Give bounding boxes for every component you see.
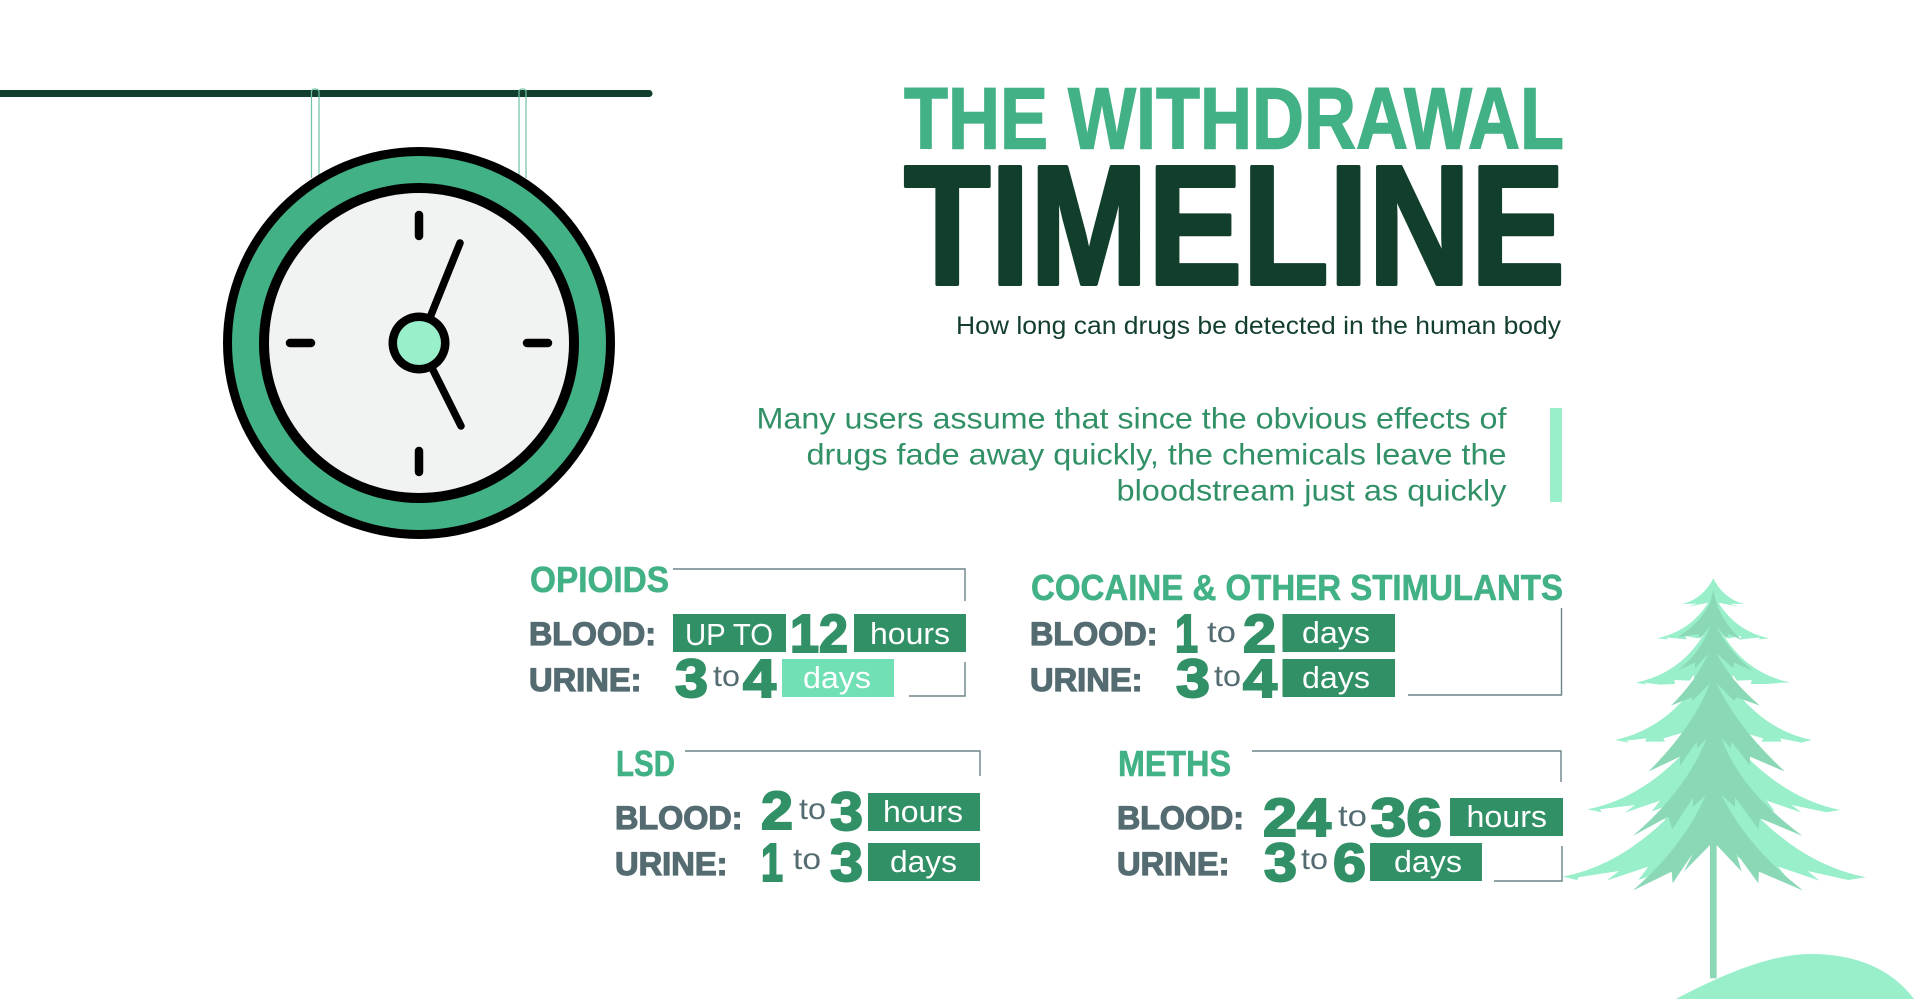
blood row: cocaine: BLOOD: bbox=[1030, 616, 1158, 652]
urine row: opioids: 3 bbox=[675, 649, 708, 709]
blood row: cocaine bbox=[1030, 604, 1395, 664]
urine row: lsd: URINE: bbox=[615, 846, 728, 882]
urine row: lsd: 3 bbox=[830, 833, 863, 893]
blood row: cocaine: to bbox=[1207, 616, 1236, 649]
panel: meths bbox=[1117, 743, 1563, 893]
urine row: lsd: 1 bbox=[761, 833, 783, 893]
urine row: meths: to bbox=[1301, 843, 1328, 876]
intro text block: bloodstream just as quickly bbox=[1116, 474, 1506, 508]
blood row: cocaine: 1 bbox=[1175, 604, 1198, 664]
blood row: opioids: 12 bbox=[790, 604, 848, 664]
icon: hill bbox=[1676, 954, 1914, 999]
heading: opioids: OPIOIDS bbox=[530, 559, 669, 600]
blood row: meths: BLOOD: bbox=[1117, 800, 1244, 836]
title: THE WITHDRAWAL bbox=[904, 70, 1564, 168]
blood row: meths: to bbox=[1338, 800, 1367, 833]
blood row: meths: 36 bbox=[1370, 788, 1442, 848]
urine row: meths: days bbox=[1394, 844, 1462, 879]
panel: cocaine and other stimulants bbox=[1030, 567, 1563, 709]
blood row: lsd: BLOOD: bbox=[615, 800, 742, 836]
urine row: cocaine: 3 bbox=[1176, 649, 1210, 709]
blood row: meths bbox=[1117, 788, 1563, 848]
intro text block bbox=[756, 402, 1507, 508]
urine row: cocaine: days bbox=[1302, 660, 1370, 695]
panel: lsd bbox=[615, 743, 980, 893]
urine row: lsd: to bbox=[793, 843, 821, 876]
intro text block: drugs fade away quickly, the chemicals leave the bbox=[806, 438, 1506, 472]
urine row: opioids bbox=[529, 649, 894, 709]
urine row: opioids: days bbox=[803, 660, 871, 695]
blood row: lsd: 2 bbox=[761, 781, 793, 841]
urine row: lsd: days bbox=[890, 844, 957, 879]
blood row: lsd: 3 bbox=[830, 782, 863, 842]
title bbox=[904, 70, 1565, 321]
blood row: lsd: hours bbox=[883, 794, 963, 829]
urine row: meths: 3 bbox=[1264, 833, 1297, 893]
intro text block: Many users assume that since the obvious effects of bbox=[756, 402, 1507, 436]
urine row: meths bbox=[1117, 833, 1482, 893]
blood row: opioids: UP TO bbox=[685, 617, 773, 652]
heading: meths: METHS bbox=[1118, 743, 1231, 784]
urine row: meths: 6 bbox=[1333, 833, 1366, 893]
blood row: cocaine: 2 bbox=[1243, 604, 1276, 664]
icon: clock bbox=[223, 147, 615, 539]
title: TIMELINE bbox=[904, 131, 1565, 321]
icon: pine tree bbox=[1563, 578, 1866, 978]
urine row: lsd bbox=[615, 833, 980, 893]
urine row: opioids: to bbox=[713, 660, 740, 693]
icon: hanging bar bbox=[0, 89, 649, 178]
panel: opioids bbox=[529, 559, 966, 709]
accent bar bbox=[1550, 408, 1562, 502]
urine row: opioids: 4 bbox=[743, 649, 776, 709]
urine row: cocaine bbox=[1030, 649, 1395, 709]
blood row: lsd bbox=[615, 781, 980, 842]
urine row: cocaine: URINE: bbox=[1030, 662, 1142, 698]
heading: cocaine: COCAINE & OTHER STIMULANTS bbox=[1031, 567, 1563, 608]
urine row: opioids: URINE: bbox=[529, 662, 642, 698]
urine row: meths: URINE: bbox=[1117, 846, 1230, 882]
heading: lsd: LSD bbox=[616, 743, 675, 784]
blood row: meths: 24 bbox=[1263, 788, 1331, 848]
blood row: opioids bbox=[529, 604, 966, 664]
blood row: lsd: to bbox=[799, 793, 826, 826]
blood row: opioids: BLOOD: bbox=[529, 616, 656, 652]
blood row: opioids: hours bbox=[870, 616, 950, 651]
blood row: meths: hours bbox=[1466, 799, 1547, 834]
urine row: cocaine: 4 bbox=[1243, 649, 1277, 709]
urine row: cocaine: to bbox=[1214, 660, 1241, 693]
blood row: cocaine: days bbox=[1302, 615, 1370, 650]
subtitle: How long can drugs be detected in the human body bbox=[956, 312, 1562, 340]
